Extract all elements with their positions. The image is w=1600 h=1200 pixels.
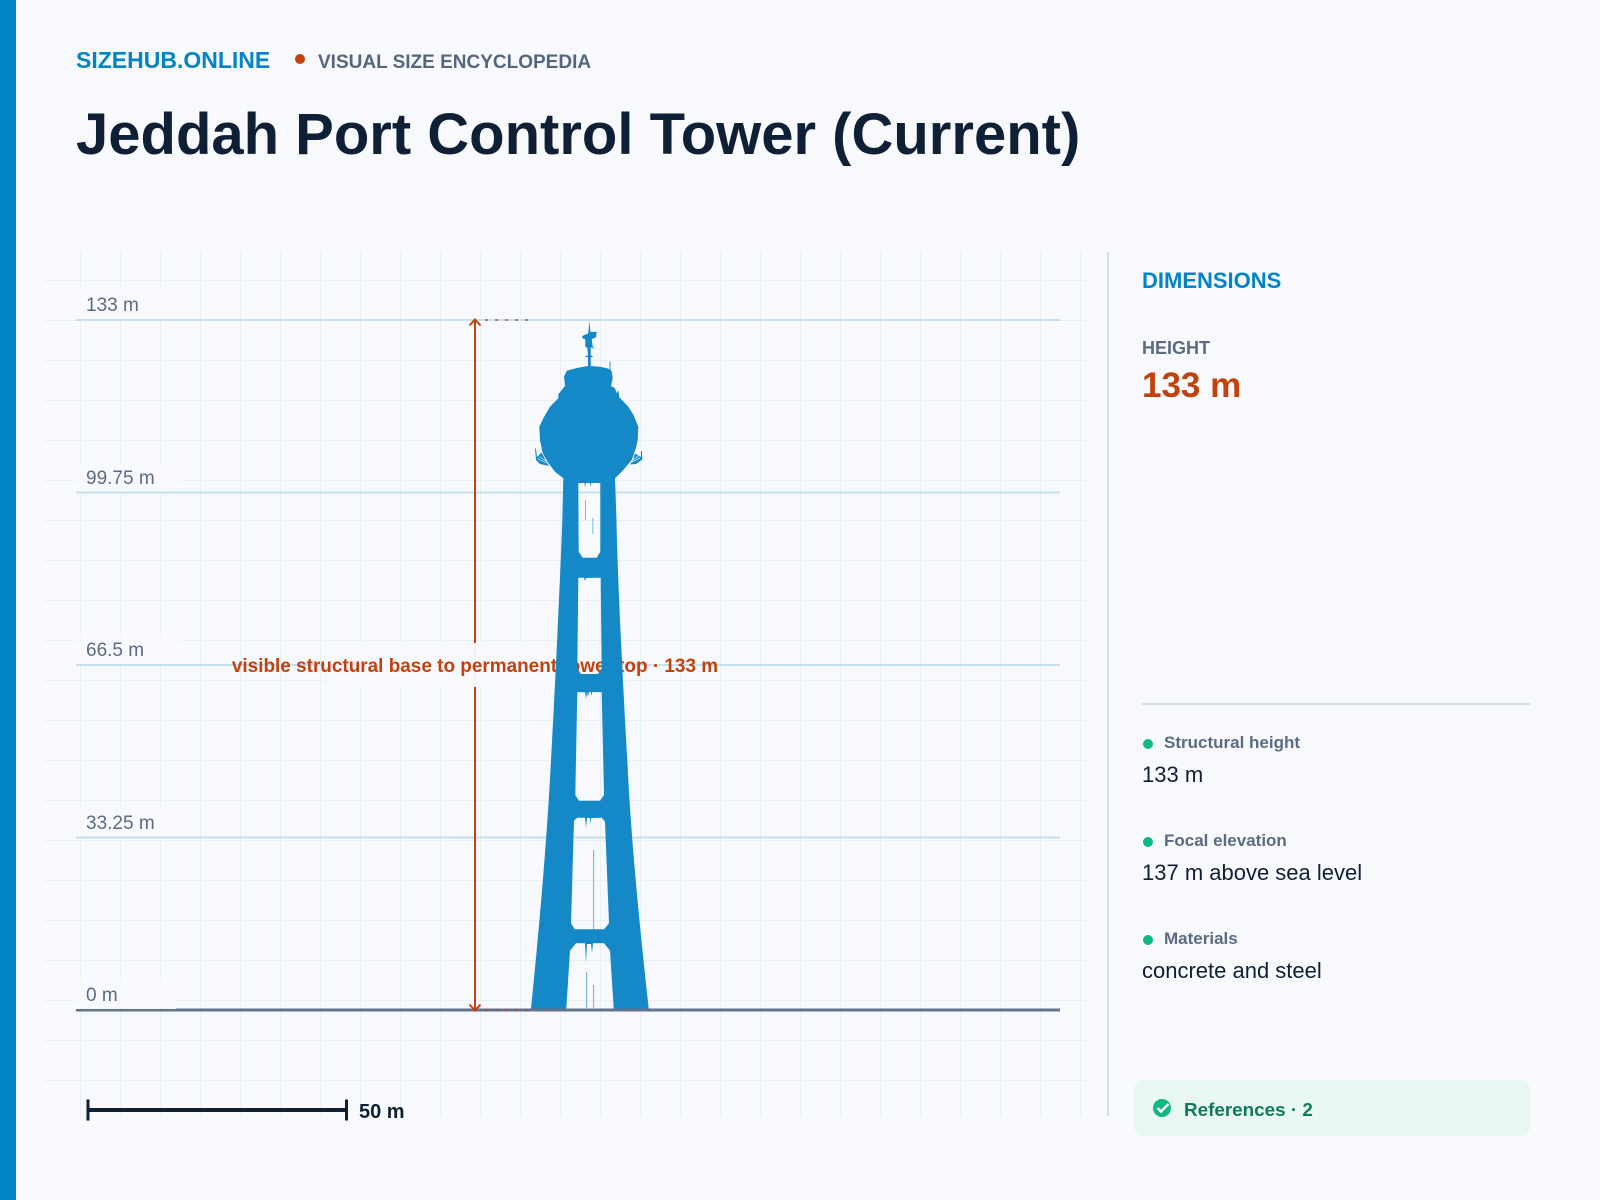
scale label: 0 m: 0 m	[86, 985, 118, 1006]
references badge	[1134, 1080, 1530, 1136]
scale label: 66.5 m: 66.5 m	[86, 640, 144, 661]
scale bar	[86, 1100, 405, 1123]
panel divider	[1107, 252, 1109, 1116]
fact: materials: concrete and steel	[1142, 958, 1322, 983]
scale label: 99.75 m	[76, 462, 180, 492]
scale label: 33.25 m: 33.25 m	[86, 813, 155, 834]
fact: materials: Materials	[1164, 929, 1238, 948]
height label: HEIGHT	[1142, 338, 1210, 358]
dimension annotation: visible structural base to permanent tower top · 133 m	[232, 656, 718, 677]
dimension annotation	[232, 643, 718, 687]
height dimension arrow	[470, 320, 530, 1010]
height rule lines	[76, 320, 1060, 838]
fact: focal elevation: 137 m above sea level	[1142, 860, 1362, 885]
header: brand line: VISUAL SIZE ENCYCLOPEDIA	[318, 52, 591, 73]
icon: check circle	[1153, 1099, 1171, 1117]
height value: 133 m	[1142, 366, 1241, 405]
scale label: 0 m	[76, 980, 176, 1009]
panel: dimensions	[1142, 268, 1530, 983]
scale label: 66.5 m	[76, 635, 180, 664]
title: Jeddah Port Control Tower (Current)	[76, 102, 1080, 167]
scale label: 133 m: 133 m	[86, 295, 139, 316]
accent bar	[0, 0, 16, 1200]
fact: structural height	[1142, 733, 1300, 787]
fact: focal elevation: Focal elevation	[1164, 831, 1287, 850]
tower silhouette	[531, 321, 649, 1008]
header: brand line	[76, 47, 591, 73]
balcony ring left	[535, 448, 549, 466]
scale label: 33.25 m	[76, 807, 180, 837]
fact: structural height: Structural height	[1164, 733, 1300, 752]
ground line	[76, 1008, 1060, 1012]
fact: focal elevation	[1142, 831, 1362, 885]
scale label: 133 m	[76, 289, 176, 319]
fact: materials	[1142, 929, 1322, 983]
header: brand line: SIZEHUB.ONLINE	[76, 47, 270, 73]
scale bar: 50 m	[359, 1101, 405, 1123]
references badge: References · 2	[1184, 1099, 1313, 1120]
panel heading: DIMENSIONS	[1142, 268, 1281, 293]
scale label: 99.75 m: 99.75 m	[86, 468, 155, 489]
balcony ring right	[630, 451, 642, 464]
fact: structural height: 133 m	[1142, 762, 1203, 787]
